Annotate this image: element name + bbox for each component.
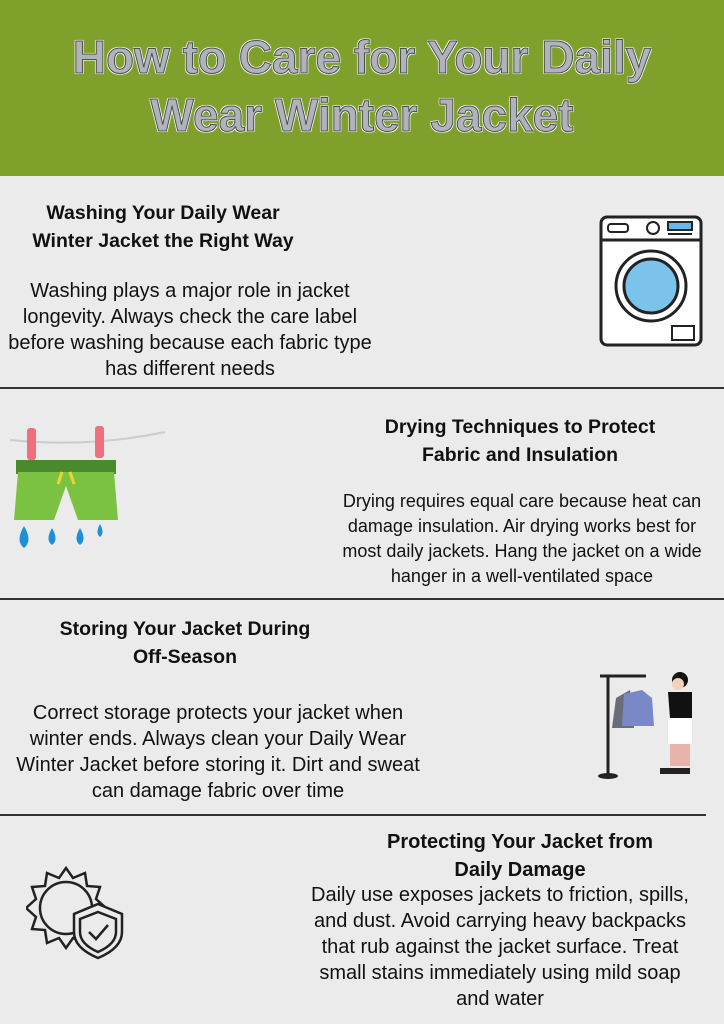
section 2 text: damage insulation. Air drying works best for xyxy=(348,516,696,536)
section 1 heading xyxy=(32,202,294,252)
title xyxy=(73,31,652,141)
section 3 text: winter ends. Always clean your Daily Wear xyxy=(30,728,406,750)
section 1 text: before washing because each fabric type xyxy=(8,332,372,354)
section 1 text xyxy=(8,280,372,380)
section 4 text: and water xyxy=(456,988,544,1010)
section 3 heading xyxy=(60,618,310,668)
section 3 text xyxy=(16,702,420,802)
section 4 text: and dust. Avoid carrying heavy backpacks xyxy=(314,910,686,932)
section 4 text xyxy=(311,884,689,1010)
section 4 heading: Daily Damage xyxy=(454,859,586,881)
header banner xyxy=(0,0,724,176)
section 4 heading: Protecting Your Jacket from xyxy=(387,831,653,853)
section 1 text: Washing plays a major role in jacket xyxy=(30,280,350,302)
section 1 text: longevity. Always check the care label xyxy=(23,306,357,328)
section 2 heading xyxy=(385,416,655,466)
section 1 heading: Winter Jacket the Right Way xyxy=(32,230,294,252)
section 3 text: Winter Jacket before storing it. Dirt and sweat xyxy=(16,754,420,776)
icon: woman with clothing rack xyxy=(598,672,692,779)
section 4 text: small stains immediately using mild soap xyxy=(319,962,681,984)
section 2 text: hanger in a well-ventilated space xyxy=(391,566,653,586)
section 3 heading: Off-Season xyxy=(133,646,237,668)
icon: shorts on line xyxy=(10,426,166,548)
section 3 text: can damage fabric over time xyxy=(92,780,344,802)
section 4 text: that rub against the jacket surface. Treat xyxy=(322,936,678,958)
section 2 text: most daily jackets. Hang the jacket on a wide xyxy=(342,541,702,561)
section 2 heading: Fabric and Insulation xyxy=(422,444,618,466)
section 2 heading: Drying Techniques to Protect xyxy=(385,416,655,438)
title: How to Care for Your Daily xyxy=(73,31,651,83)
title: Wear Winter Jacket xyxy=(150,89,574,141)
section 4 heading xyxy=(387,831,653,881)
icon: washing machine xyxy=(600,216,702,346)
section 3 text: Correct storage protects your jacket when xyxy=(33,702,403,724)
section 2 text: Drying requires equal care because heat can xyxy=(343,491,701,511)
section 1 text: has different needs xyxy=(105,358,275,380)
section 2 text xyxy=(342,491,702,586)
icon: sun and shield xyxy=(26,866,124,960)
section 4 text: Daily use exposes jackets to friction, spills, xyxy=(311,884,689,906)
section 3 heading: Storing Your Jacket During xyxy=(60,618,310,640)
section 1 heading: Washing Your Daily Wear xyxy=(46,202,280,224)
